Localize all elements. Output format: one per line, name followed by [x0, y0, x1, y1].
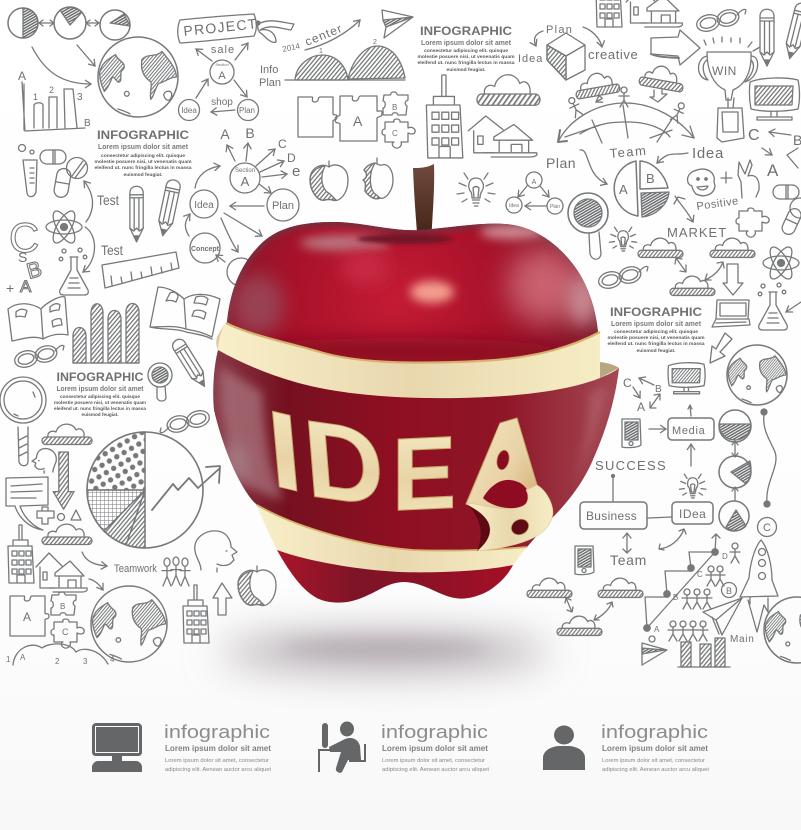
box: media: Media	[672, 425, 706, 437]
icon: paper plane lower	[703, 598, 742, 635]
ground shadow	[220, 632, 550, 672]
icon: lightbulb small	[609, 227, 637, 251]
icon: cube	[547, 33, 585, 80]
text block: infographic right	[608, 305, 705, 353]
text block: infographic upper left: euismod feugiat.	[124, 172, 162, 177]
chart: pie A B	[614, 161, 669, 217]
arrow: pie to market	[674, 196, 693, 222]
icon: puzzle pieces: C	[392, 129, 398, 138]
project box: PROJECT	[183, 15, 258, 39]
icon: speech bubble	[6, 477, 48, 530]
mind map: plan circle: Plan	[272, 200, 294, 212]
icon: letters C A B: A	[20, 277, 32, 296]
text block: infographic upper left: INFOGRAPHIC	[97, 128, 189, 142]
icon: apple	[310, 161, 348, 201]
bottom item: monitor: adipiscing elit. Aenean auctor arcu aliquet	[165, 767, 272, 773]
doodles: lower right	[527, 345, 801, 667]
icon: tablet	[622, 419, 641, 448]
icon: outline down arrow	[723, 264, 743, 295]
mind map: small triangle: A	[532, 179, 537, 186]
icon: person bust	[543, 726, 585, 770]
icon: open book left	[8, 297, 68, 341]
bottom item: seated person: Lorem ipsum dolor sit amet	[382, 744, 488, 753]
icon: monitor small	[668, 363, 705, 394]
icon: letters C A B: S	[18, 249, 27, 265]
word IDEA on apple	[262, 386, 553, 551]
bottom item: seated person	[318, 721, 490, 773]
bottom item: monitor	[92, 721, 272, 773]
doodles: top center	[178, 10, 413, 120]
icon: building	[426, 75, 463, 158]
label: info plan: Info	[260, 64, 278, 76]
chart: growth line with people: D	[722, 552, 728, 561]
chart: hatched domes	[285, 39, 405, 80]
icon: lightbulb	[457, 173, 495, 206]
mind map: section A large: A	[220, 126, 230, 142]
arrow: circles to globe	[32, 45, 95, 84]
apple upper body	[227, 222, 599, 366]
icon: person at desk	[318, 722, 366, 773]
doodles: upper left	[6, 7, 220, 435]
icon: trophy	[698, 37, 760, 142]
mind map: section A	[178, 43, 258, 120]
apple right flap inner	[600, 362, 619, 378]
chart: growth line with people	[644, 534, 740, 641]
text block: infographic right: INFOGRAPHIC	[610, 305, 702, 319]
icon: cloud lower	[42, 524, 92, 544]
apple middle peel	[213, 350, 619, 551]
text block: infographic top center: INFOGRAPHIC	[420, 24, 512, 38]
icon: pencil	[130, 186, 143, 242]
arrow: business to success	[612, 474, 614, 501]
icon: B circle	[722, 582, 736, 598]
arrow: toward flask	[786, 302, 801, 312]
icon: glasses top	[695, 7, 746, 34]
icon: bitten apple	[363, 158, 393, 199]
text block: infographic top center: eleifend ut. nunc fringilla lectus in massa	[418, 60, 515, 65]
arrow: hollow down-left	[710, 333, 732, 363]
chart: hatched domes: 2	[373, 39, 377, 46]
mind map: section A: Plan	[239, 106, 255, 115]
icon: clouds with arrows	[574, 63, 685, 102]
arrows to teamwork and globe	[82, 552, 107, 590]
arrow: pill to atom	[83, 181, 95, 272]
text block: infographic left: molestie posuere nisi, ut venenatis quam	[54, 400, 146, 405]
text block: infographic upper left: molestie posuere nisi, ut venenatis quam	[94, 159, 192, 164]
icon: glasses right	[597, 264, 648, 291]
box: media	[649, 405, 714, 466]
label: 2014 center with arrow: 2014	[282, 41, 301, 54]
icon: globe partial	[764, 597, 801, 663]
word IDEA on apple: I	[262, 386, 307, 516]
apple	[213, 164, 619, 603]
text block: infographic right: eleifend ut. nunc fringilla lectus in massa	[608, 341, 705, 346]
chart: hatched bars bottom	[678, 638, 730, 667]
mind map: section A: Idea	[181, 106, 197, 115]
icon: monitor	[749, 78, 800, 120]
bottom item: person	[543, 721, 710, 773]
doodles: lower left	[0, 377, 276, 666]
bar chart doodle: B	[84, 118, 91, 129]
text block: infographic right: consectetur adipiscing elit. quisque	[614, 329, 698, 334]
apple lower band gold edge	[257, 505, 527, 551]
icon: monitor solid	[92, 723, 142, 772]
labels: plan idea creative: creative	[588, 47, 638, 62]
icon: building lower	[183, 585, 209, 643]
icon: C B A small: C	[623, 376, 632, 390]
icon: numbered arcs: 2	[55, 657, 60, 666]
icon: three pie circles with arrows	[8, 7, 130, 40]
label: 2014 center with arrow	[282, 20, 360, 54]
icon: victory hand	[738, 160, 759, 198]
bottom item: seated person: Lorem ipsum dolor sit amet, consectetur	[382, 758, 485, 764]
mind map: section A large: B	[245, 125, 255, 141]
icon: pills	[40, 150, 88, 198]
bottom item: monitor: infographic	[164, 721, 270, 742]
mind map: section A large: e	[292, 163, 300, 180]
chart: growth line with people: C	[697, 570, 703, 579]
icon: flask right	[758, 283, 787, 330]
icon: numbered arcs: A	[20, 653, 26, 662]
chart: pie A B: B	[646, 171, 655, 186]
text block: infographic top center	[418, 24, 515, 72]
icon: building top	[596, 0, 622, 27]
icon: hatched down arrow	[53, 452, 74, 509]
word IDEA on apple: E	[392, 415, 456, 533]
text block: infographic left: INFOGRAPHIC	[56, 370, 144, 384]
label: main: Main	[730, 634, 754, 645]
labels: plan idea creative	[518, 24, 638, 65]
label: success: SUCCESS	[595, 458, 667, 473]
icon: pills right	[773, 185, 801, 236]
icon: C B A triangle	[748, 127, 801, 180]
icon: glasses left	[13, 343, 64, 370]
icon: puzzle pieces: B	[392, 103, 397, 112]
icon: pencil tilted	[156, 179, 181, 237]
mind map: plan circle	[230, 189, 299, 221]
text block: infographic top center: molestie posuere nisi, ut venenatis quam	[418, 54, 514, 59]
bottom item: monitor: Lorem ipsum dolor sit amet	[165, 744, 271, 753]
labels: team plan idea	[546, 143, 724, 184]
text block: infographic upper left: Lorem ipsum dolor sit amet	[98, 144, 189, 151]
icon: atom right	[763, 244, 799, 282]
icon: houses	[468, 116, 537, 157]
icon: laptop	[712, 300, 750, 327]
doodles: center above apple	[185, 75, 563, 286]
icon: ruler	[102, 252, 179, 288]
bar chart doodle: 3	[77, 92, 83, 103]
bottom item: seated person: adipiscing elit. Aenean auctor arcu aliquet	[382, 767, 490, 773]
mind map: small triangle	[506, 172, 563, 214]
icon: puzzle lower: B	[60, 602, 65, 611]
mind map: section A: sale	[211, 44, 235, 56]
icon: globe	[98, 37, 178, 117]
icon: clouds lower	[527, 578, 643, 635]
mind map: small triangle: Plan	[550, 204, 560, 210]
chart: hatched domes: 1	[319, 48, 323, 55]
apple cream band upper	[218, 323, 600, 398]
icon: pencil pair	[760, 2, 801, 66]
apple bite hole in A	[483, 480, 529, 508]
bottom item: monitor: Lorem ipsum dolor sit amet, consectetur	[165, 758, 269, 764]
text block: infographic right: euismod feugiat.	[636, 348, 676, 353]
icon: C circle	[758, 518, 776, 536]
icon: magnifier right	[568, 193, 608, 259]
bottom item: person: adipiscing elit. Aenean auctor arcu aliquet	[602, 767, 710, 773]
icon: glasses lower	[160, 408, 211, 435]
mind map: section A large: D	[287, 151, 296, 165]
icon: puzzle lower	[10, 592, 84, 648]
icon: tablet lower	[575, 546, 594, 575]
bar chart doodle: 1	[33, 92, 38, 102]
doodles: upper right	[518, 0, 801, 363]
icon: open book right	[150, 287, 220, 339]
mind map: concept circle	[185, 214, 255, 286]
icon: up arrow	[213, 583, 232, 615]
icon: globe lower	[91, 586, 167, 662]
icon: cloud	[42, 424, 92, 444]
apple band gold edge	[226, 323, 600, 363]
icon: snake line	[761, 409, 776, 507]
box: business: Business	[586, 509, 637, 523]
icon: puzzle pieces: A	[353, 113, 363, 129]
icon: letters C A B: B	[24, 256, 44, 284]
label: 2014 center with arrow: center	[303, 21, 345, 49]
icon: face	[688, 169, 715, 196]
icon: C circle: C	[763, 522, 771, 534]
text block: infographic upper left	[94, 128, 192, 177]
icon: head small	[32, 449, 56, 473]
labels: team plan idea: Idea	[692, 145, 724, 162]
icon: numbered arcs: 4	[110, 655, 115, 664]
icon: team people	[162, 557, 190, 586]
box: idea: IDea	[679, 507, 706, 521]
icon: hatched bar chart	[73, 304, 139, 363]
icon: trophy: WIN	[712, 64, 737, 78]
mind map: idea circle: Idea	[194, 200, 214, 211]
text block: infographic left: eleifend ut. nunc fringilla lectus in massa	[54, 406, 146, 411]
apple lower cream band	[257, 505, 527, 572]
mind map: concept circle: Concept	[191, 246, 220, 253]
label: test: Test	[97, 192, 119, 208]
mind map: section A large	[220, 125, 300, 193]
icon: B circle: B	[726, 586, 732, 596]
text block: infographic top center: euismod feugiat.	[446, 67, 486, 72]
bottom item: person: Lorem ipsum dolor sit amet, consectetur	[602, 758, 705, 764]
icon: pencil large	[170, 337, 210, 390]
mind map: section A large: C	[278, 137, 287, 151]
mind map: section A: shop	[211, 97, 233, 108]
icon: big magnifier	[0, 377, 46, 466]
icon: C B A small	[623, 376, 662, 414]
icon: building	[8, 525, 34, 583]
icon: numbered arcs: 3	[83, 657, 88, 666]
icon: big head	[195, 531, 237, 572]
icon: flask	[59, 248, 88, 295]
label: team: Team	[610, 552, 647, 568]
icon: numbered arcs: 1	[6, 655, 11, 664]
text block: infographic right: molestie posuere nisi, ut venenatis quam	[608, 335, 704, 340]
apple bottom lobes	[277, 550, 513, 603]
text block: infographic upper left: consectetur adipiscing elit. quisque	[101, 153, 185, 158]
icon: puzzle right	[736, 208, 769, 237]
label: plus and positive: Positive	[696, 195, 740, 213]
chart: growth line with people: B	[673, 593, 678, 602]
icon: houses top	[626, 0, 682, 27]
text block: infographic top center: consectetur adipiscing elit. quisque	[424, 48, 508, 53]
icon: paper plane	[382, 10, 413, 38]
text block: infographic top center: Lorem ipsum dolor sit amet	[421, 40, 512, 47]
text block: infographic left: euismod feugiat.	[82, 412, 118, 417]
box: idea	[672, 502, 713, 524]
label: info plan: Plan	[259, 77, 281, 89]
icon: letters C A B: C	[9, 214, 39, 261]
icon: numbered arcs	[6, 644, 115, 666]
mind map: section A: Section	[215, 62, 229, 67]
icon: C B A triangle: A	[767, 161, 779, 180]
label: test 2: Test	[101, 242, 123, 258]
chart: arc with people	[558, 87, 694, 143]
icon: ribbon	[258, 21, 294, 42]
apple left peel back flap	[216, 323, 225, 350]
icon: puzzle lower: C	[62, 627, 69, 637]
text block: infographic left: consectetur adipiscing elit. quisque	[60, 394, 140, 399]
bar chart doodle: A	[18, 69, 26, 83]
text block: infographic right: Lorem ipsum dolor sit amet	[611, 321, 702, 328]
icon: letters C A B	[6, 214, 44, 296]
peel fold shadow	[466, 504, 490, 551]
bar chart doodle: 2	[49, 85, 54, 95]
mind map: section A large: A	[241, 174, 250, 189]
peel curl	[466, 485, 553, 551]
label: plus and positive	[696, 172, 740, 213]
icon: apple	[238, 566, 276, 606]
icon: letters C A B: +	[6, 280, 14, 296]
icon: C B A small: A	[637, 400, 645, 414]
labels: team plan idea: Plan	[546, 155, 576, 171]
icon: cloud	[477, 75, 540, 105]
bottom item: seated person: infographic	[381, 721, 488, 742]
icon: C B A triangle: C	[748, 127, 760, 144]
text block: infographic upper left: eleifend ut. nunc fringilla lectus in massa	[94, 165, 192, 170]
icon: clouds market	[638, 238, 755, 295]
bar chart doodle	[18, 69, 91, 131]
label: team	[610, 529, 686, 568]
apple stem	[413, 164, 434, 245]
mind map: small triangle: Idea	[509, 203, 519, 209]
bottom item: person: infographic	[601, 721, 708, 742]
mind map: section A large: Section	[235, 168, 255, 174]
mind map: section A: A	[218, 70, 226, 82]
icon: puzzle lower: A	[23, 610, 31, 624]
chart: three circles	[719, 410, 751, 531]
text block: infographic left	[54, 370, 146, 417]
icon: houses	[36, 553, 87, 592]
labels: team plan idea: Team	[609, 143, 648, 161]
icon: atom	[46, 208, 82, 246]
box: business	[580, 502, 672, 529]
chart: pie doodle	[87, 432, 220, 548]
labels: plan idea creative: Idea	[518, 53, 543, 65]
labels: plan idea creative: Plan	[546, 24, 573, 36]
mind map: idea circle	[190, 166, 262, 252]
text block: infographic left: Lorem ipsum dolor sit amet	[56, 386, 144, 393]
chart: growth line with people: A	[654, 625, 660, 634]
icon: test tube	[18, 144, 37, 197]
icon: flag plane	[642, 636, 667, 665]
bottom item: person: Lorem ipsum dolor sit amet	[602, 744, 708, 753]
letter A solid wedge and glyph: A	[464, 391, 545, 526]
icon: lightbulb media	[679, 474, 706, 498]
label: market: MARKET	[667, 225, 727, 240]
icon: globe right	[727, 345, 787, 405]
icon: plus circle triangle	[37, 507, 81, 524]
label: teamwork: Teamwork	[114, 563, 157, 575]
word IDEA on apple: D	[299, 397, 389, 530]
icon: block arrow	[651, 30, 700, 65]
icon: rocket	[740, 540, 778, 632]
peel small hole	[509, 516, 531, 538]
chart: pie A B: A	[619, 182, 628, 197]
icon: small magnifier	[148, 363, 172, 401]
icon: C B A small: B	[655, 384, 662, 395]
icon: puzzle pieces	[298, 92, 415, 148]
